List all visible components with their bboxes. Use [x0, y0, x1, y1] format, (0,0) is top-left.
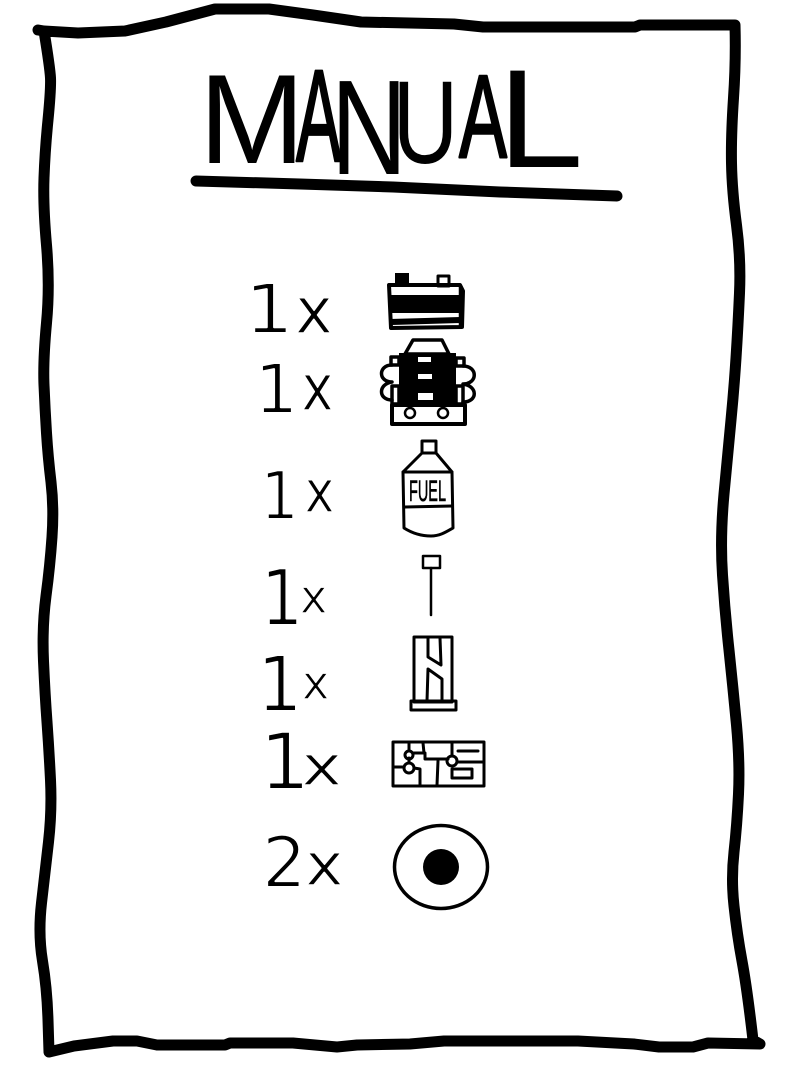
quantity: [257, 640, 330, 730]
icon: engine: [382, 340, 474, 424]
icon: pin: [423, 556, 440, 615]
title: [199, 41, 583, 203]
quantity: [262, 822, 344, 904]
row: 1x engine: [254, 340, 474, 430]
icon: wheel: [394, 826, 488, 908]
title: U: [393, 58, 458, 189]
quantity: 1: [259, 717, 310, 808]
title: N: [331, 51, 407, 203]
quantity: 2: [262, 822, 307, 904]
quantity: x: [301, 734, 342, 798]
quantity: 1: [261, 553, 303, 644]
title: A: [296, 43, 342, 190]
quantity: x: [295, 275, 333, 349]
icon: fuel bottle: FUEL: [409, 475, 446, 508]
quantity: [259, 717, 342, 808]
row: 1x pin: [261, 553, 440, 644]
row: 1x fuel: [260, 441, 453, 536]
quantity: x: [300, 570, 328, 625]
row: 1x circuit board: [259, 717, 484, 808]
quantity: [244, 270, 333, 350]
icon: circuit board: [393, 742, 484, 786]
quantity: [260, 458, 335, 536]
icon: battery: [389, 273, 463, 328]
quantity: [261, 553, 328, 644]
row: 2x wheel: [262, 822, 488, 908]
quantity: x: [305, 830, 344, 899]
quantity: x: [301, 352, 334, 426]
quantity: 1: [254, 350, 298, 430]
quantity: x: [304, 458, 335, 526]
icon: tower: [411, 637, 456, 710]
quantity: 1: [244, 270, 294, 350]
row: 1x battery: [244, 270, 463, 350]
quantity: 1: [257, 640, 303, 730]
title: M: [199, 48, 305, 190]
title: L: [498, 41, 583, 197]
icon: fuel bottle: [403, 441, 453, 536]
quantity: x: [302, 656, 330, 711]
quantity: [254, 350, 334, 430]
title underline: [196, 181, 617, 196]
quantity: 1: [260, 458, 299, 536]
row: 1x tower: [257, 637, 456, 730]
title: A: [459, 51, 507, 182]
